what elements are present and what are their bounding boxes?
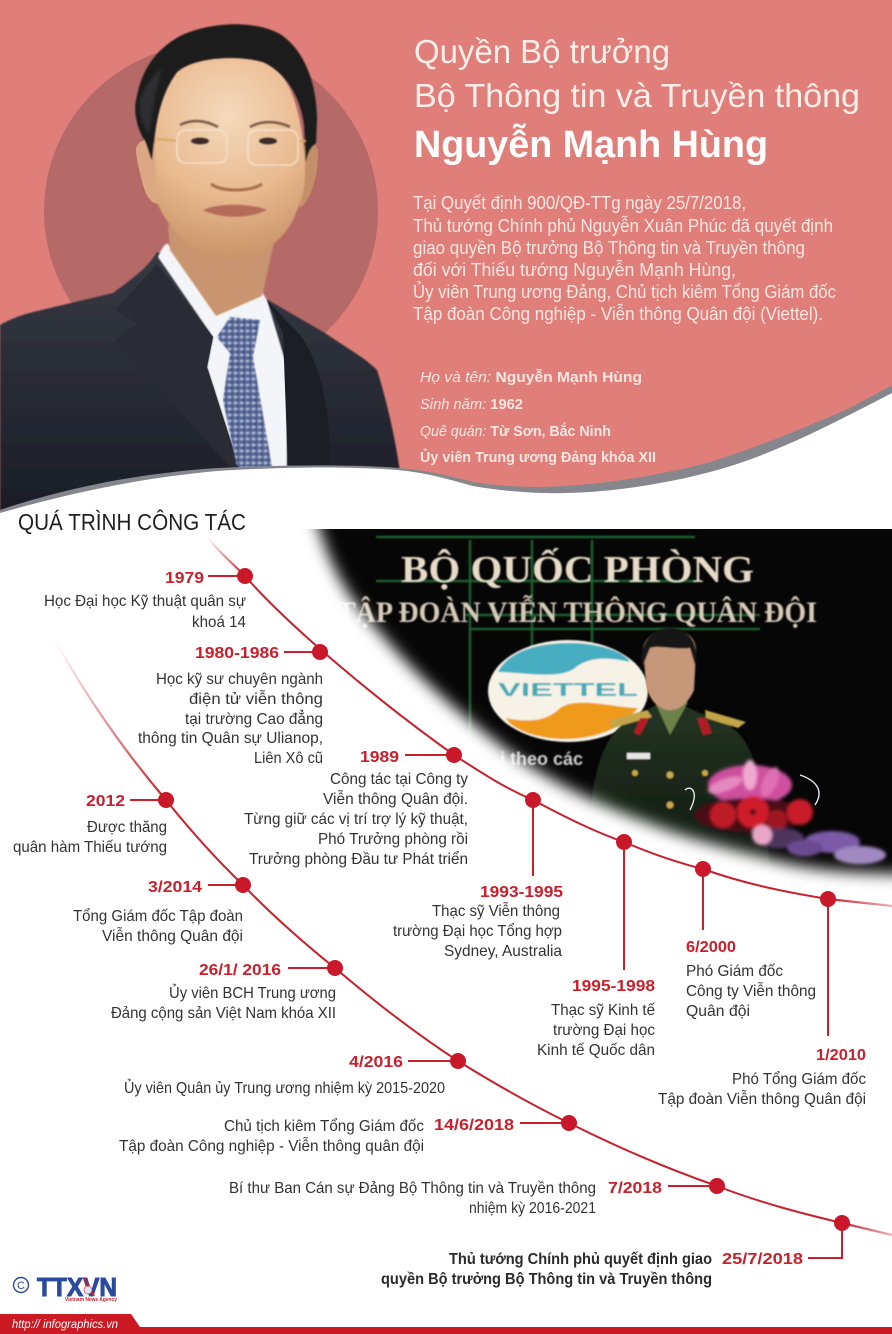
flowers — [694, 760, 886, 864]
lower timeline curve — [55, 640, 892, 1235]
intro paragraph: Tại Quyết định 900/QĐ-TTg ngày 25/7/2018, — [413, 193, 746, 213]
banner text — [337, 547, 817, 629]
milestone 1993-1995: Thạc sỹ Viễn thông — [432, 901, 560, 920]
intro paragraph: Thủ tướng Chính phủ Nguyễn Xuân Phúc đã quyết định — [413, 215, 833, 236]
curved divider — [0, 385, 892, 535]
milestone 1/2010 — [658, 891, 866, 1108]
milestone 3/2014 — [73, 877, 251, 945]
title: Bộ Thông tin và Truyền thông — [414, 77, 860, 114]
milestone 1980-1986: thông tin Quân sự Ulianop, — [138, 730, 323, 747]
personal details — [420, 369, 656, 466]
milestone 1995-1998: Thạc sỹ Kinh tế — [551, 1002, 655, 1019]
milestone 1989: Phó Trưởng phòng rồi — [318, 831, 468, 848]
intro paragraph: Tập đoàn Công nghiệp - Viễn thông Quân đội (Viettel). — [413, 303, 823, 324]
intro paragraph: đối với Thiếu tướng Nguyễn Mạnh Hùng, — [413, 259, 736, 280]
milestone 25/7/2018: quyền Bộ trưởng Bộ Thông tin và Truyền thông — [381, 1271, 712, 1288]
milestone 14/6/2018: Chủ tịch kiêm Tổng Giám đốc — [224, 1117, 424, 1135]
milestone 3/2014: Viễn thông Quân đội — [102, 926, 243, 945]
milestone 25/7/2018: 25/7/2018 — [722, 1251, 803, 1268]
milestone 6/2000: Quân đội — [686, 1003, 750, 1020]
title — [414, 33, 860, 166]
banner text: TẬP ĐOÀN VIỄN THÔNG QUÂN ĐỘI — [337, 595, 817, 629]
milestone 1995-1998 — [537, 834, 655, 1059]
milestone 26/1/2016 — [111, 960, 343, 1022]
milestone 1980-1986: tại trường Cao đẳng — [185, 709, 323, 728]
suit — [0, 252, 400, 520]
milestone 2012: quân hàm Thiếu tướng — [13, 839, 167, 856]
section heading: QUÁ TRÌNH CÔNG TÁC — [18, 508, 246, 535]
milestone 1995-1998: trường Đại học — [553, 1022, 655, 1039]
milestone 1989: Từng giữ các vị trí trợ lý kỹ thuật, — [244, 811, 468, 828]
shirt — [158, 244, 287, 470]
personal details: Sinh năm: 1962 — [420, 396, 523, 413]
soldier — [592, 628, 769, 862]
personal details: Ủy viên Trung ương Đảng khóa XII — [420, 448, 656, 466]
milestone 14/6/2018 — [119, 1115, 577, 1155]
footer bar: http:// infographics.vn — [12, 1317, 118, 1331]
milestone 2012 — [13, 792, 174, 856]
milestone 1980-1986: Liên Xô cũ — [254, 750, 323, 767]
milestone 6/2000: Phó Giám đốc — [686, 963, 783, 980]
milestone 2012: 2012 — [86, 793, 125, 810]
green stage frame — [375, 534, 761, 732]
milestone 1993-1995: 1993-1995 — [480, 884, 563, 901]
personal details: Họ và tên: Nguyễn Mạnh Hùng — [420, 369, 642, 386]
milestone 1989: 1989 — [360, 749, 399, 766]
intro paragraph — [413, 193, 836, 324]
milestone 1979: khoá 14 — [192, 614, 246, 631]
intro paragraph: Ủy viên Trung ương Đảng, Chủ tịch kiêm Tổng Giám đốc — [413, 281, 836, 302]
milestone 7/2018: 7/2018 — [608, 1180, 662, 1197]
photo: Viettel event — [306, 529, 892, 887]
portrait backing circle — [44, 44, 378, 378]
milestone 1993-1995 — [393, 792, 563, 960]
title: Quyền Bộ trưởng — [414, 33, 670, 70]
milestone 1980-1986: 1980-1986 — [195, 645, 279, 662]
milestone 1980-1986 — [138, 644, 328, 767]
milestone 1/2010: Tập đoàn Viễn thông Quân đội — [658, 1089, 866, 1108]
milestone 1989: Viễn thông Quân đội. — [323, 789, 468, 808]
footer bar — [0, 1314, 892, 1334]
Viettel logo — [488, 640, 648, 742]
milestone 6/2000: Công ty Viễn thông — [686, 981, 816, 1000]
milestone 1989: Trưởng phòng Đầu tư Phát triển — [249, 850, 468, 868]
milestone 1979: Học Đại học Kỹ thuật quân sự — [44, 593, 246, 610]
milestone 1989 — [244, 747, 468, 868]
facial features — [157, 121, 306, 217]
milestone 26/1/2016: 26/1/ 2016 — [199, 962, 281, 979]
milestone 1979 — [44, 568, 253, 631]
milestone 1995-1998: Kinh tế Quốc dân — [537, 1042, 655, 1059]
milestone 1993-1995: trường Đại học Tổng hợp — [393, 922, 562, 940]
milestone 14/6/2018: Tập đoàn Công nghiệp - Viễn thông quân đội — [119, 1136, 424, 1155]
portrait photo — [0, 24, 400, 520]
bouquet ribbons — [685, 775, 819, 810]
milestone 1/2010: Phó Tổng Giám đốc — [732, 1070, 866, 1088]
milestone 1/2010: 1/2010 — [816, 1047, 866, 1064]
milestone 1980-1986: Học kỹ sư chuyên ngành — [156, 671, 323, 688]
milestone 25/7/2018: Thủ tướng Chính phủ quyết định giao — [449, 1251, 712, 1268]
upper timeline curve — [207, 537, 892, 906]
milestone 7/2018: nhiệm kỳ 2016-2021 — [469, 1200, 596, 1217]
milestone 26/1/2016: Đảng cộng sản Việt Nam khóa XII — [111, 1005, 336, 1022]
milestone 3/2014: Tổng Giám đốc Tập đoàn — [73, 907, 243, 925]
header background — [0, 0, 892, 520]
logo: TTXVN: TTXVN — [37, 1272, 117, 1302]
milestone 25/7/2018 — [381, 1215, 850, 1288]
milestone 4/2016 — [124, 1053, 466, 1097]
milestone 26/1/2016: Ủy viên BCH Trung ương — [169, 983, 336, 1002]
hair — [135, 24, 317, 162]
milestone 4/2016: Ủy viên Quân ủy Trung ương nhiệm kỳ 2015-2020 — [124, 1078, 445, 1097]
tie — [217, 317, 272, 467]
lapels — [115, 264, 240, 470]
intro paragraph: giao quyền Bộ trưởng Bộ Thông tin và Truyền thông — [413, 238, 805, 258]
milestone 6/2000 — [686, 861, 816, 1020]
milestone 14/6/2018: 14/6/2018 — [434, 1117, 514, 1134]
neck — [168, 225, 278, 316]
Viettel logo: VIETTEL — [498, 680, 638, 700]
personal details: Quê quán: Từ Sơn, Bắc Ninh — [420, 422, 611, 440]
slogan fragment: i theo các — [500, 749, 583, 769]
banner text: BỘ QUỐC PHÒNG — [401, 547, 754, 591]
milestone 2012: Được thăng — [87, 819, 167, 836]
milestone 4/2016: 4/2016 — [349, 1054, 403, 1071]
head — [155, 58, 305, 259]
milestone 7/2018: Bí thư Ban Cán sự Đảng Bộ Thông tin và Truyền thông — [229, 1180, 596, 1197]
milestone 7/2018 — [229, 1178, 725, 1217]
milestone 6/2000: 6/2000 — [686, 939, 736, 956]
milestone 1989: Công tác tại Công ty — [330, 771, 468, 788]
milestone 3/2014: 3/2014 — [148, 879, 202, 896]
milestone 1980-1986: điện tử viễn thông — [189, 689, 323, 708]
milestone 1993-1995: Sydney, Australia — [444, 943, 562, 960]
ears — [136, 140, 160, 204]
milestone 1995-1998: 1995-1998 — [572, 978, 655, 995]
logo: TTXVN: C — [17, 1280, 25, 1292]
title: Nguyễn Mạnh Hùng — [414, 122, 768, 166]
milestone 1979: 1979 — [165, 570, 204, 587]
white curved fade over photo — [290, 529, 892, 899]
logo: TTXVN: Vietnam News Agency — [65, 1297, 117, 1303]
